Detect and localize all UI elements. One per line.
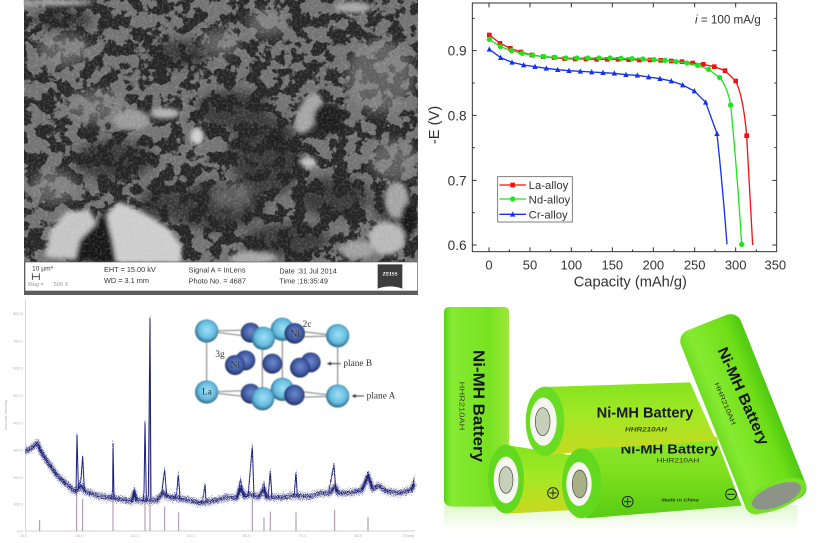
SEM info bar: Date :31 Jul 2014 <box>279 266 337 275</box>
y axis labels: 0.7 <box>448 173 467 188</box>
series: Cr-alloy <box>489 49 727 244</box>
series: La-alloy <box>489 35 753 245</box>
XRD axes: 100.0 <box>13 503 23 507</box>
battery: front lying <box>562 437 742 518</box>
XRD axes: 600.0 <box>13 367 23 371</box>
battery: standing left: Ni-MH Battery <box>469 350 486 462</box>
current annotation: i = 100 mA/g <box>695 14 761 27</box>
XRD axes: 700.0 <box>13 339 23 343</box>
battery: standing left <box>444 307 509 507</box>
XRD axes: 2Theta <box>402 534 415 538</box>
y axis title: -E (V) <box>427 106 443 144</box>
panel: Ni-MH batteries photo <box>444 307 811 532</box>
SEM info bar: Time :16:35:49 <box>279 276 328 285</box>
plot frame and ticks <box>472 3 777 252</box>
ZEISS logo <box>378 264 402 289</box>
x axis labels <box>485 257 786 272</box>
SEM info bar <box>24 262 418 295</box>
crystal labels: 3g <box>215 350 225 360</box>
crystal labels <box>202 320 396 402</box>
reference sticks <box>40 328 368 531</box>
legend: Nd-alloy <box>529 194 571 206</box>
x axis labels: 350 <box>764 257 786 272</box>
battery: front lying: Made in China <box>661 497 699 503</box>
x axis labels: 0 <box>485 257 493 272</box>
series: Nd-alloy <box>489 39 744 247</box>
plus symbol <box>622 496 633 507</box>
SEM info bar: Signal A = InLens <box>189 266 246 275</box>
XRD axes: 0.0 <box>17 529 23 533</box>
ZEISS logo: ZEISS <box>382 272 398 278</box>
XRD axes: 500.0 <box>13 394 23 398</box>
XRD axes: 70.0 <box>299 534 306 538</box>
x axis title: Capacity (mAh/g) <box>574 275 687 291</box>
XRD axes: 50.0 <box>187 534 195 538</box>
minus symbol <box>726 489 736 500</box>
XRD axes: 400.0 <box>13 421 23 425</box>
XRD axes <box>4 299 415 538</box>
XRD axes: 300.0 <box>13 449 23 453</box>
crystal labels: plane B <box>343 359 372 369</box>
floor reflection <box>444 505 797 532</box>
crystal labels: plane A <box>367 392 396 402</box>
plus symbol <box>548 488 558 498</box>
x axis labels: 250 <box>684 257 705 272</box>
battery: middle lying: HHR210AH <box>625 427 667 434</box>
battery: standing left: HHR210AH <box>458 382 467 430</box>
crystal labels: Ni <box>291 329 300 339</box>
SEM info bar: 500 X <box>54 282 69 288</box>
XRD axes: 800.0 <box>13 312 23 316</box>
SEM info bar: WD = 3.1 mm <box>104 276 149 285</box>
x axis labels: 100 <box>560 257 582 272</box>
y axis labels <box>448 44 467 253</box>
SEM info bar: Photo No. = 4687 <box>189 276 246 285</box>
crystal labels: La <box>202 388 213 398</box>
scale bar <box>32 273 39 280</box>
XRD axes: 40.0 <box>131 534 139 538</box>
panel: XRD pattern <box>4 299 415 538</box>
XRD axes: 20.0 <box>20 534 27 538</box>
SEM info bar: EHT = 15.00 kV <box>104 265 156 274</box>
x axis labels: 300 <box>725 257 746 272</box>
legend: Cr-alloy <box>529 209 568 221</box>
x axis labels: 150 <box>601 257 623 272</box>
panel: discharge curves chart <box>427 3 786 291</box>
XRD axes: 30.0 <box>76 534 83 538</box>
XRD axes: 60.0 <box>243 534 250 538</box>
crystal structure diagram <box>195 318 364 410</box>
battery: front lying: Ni-MH Battery <box>621 443 718 457</box>
y axis labels: 0.6 <box>448 238 467 253</box>
battery: middle lying: Ni-MH Battery <box>597 406 694 422</box>
y axis labels: 0.8 <box>448 108 467 123</box>
SEM info bar: Mag = <box>28 282 45 288</box>
XRD axes: 80.0 <box>355 534 362 538</box>
battery: middle lying <box>526 382 717 456</box>
crystal labels: Ni <box>231 361 240 371</box>
panel: SEM micrograph <box>13 0 418 295</box>
battery: leaning right: Ni-MH Battery <box>714 345 772 448</box>
XRD axes: Absolute Intensity <box>4 400 8 430</box>
x axis labels: 50 <box>523 257 537 272</box>
x axis labels: 200 <box>642 257 664 272</box>
legend <box>498 177 572 222</box>
crystal labels: 2c <box>303 320 311 330</box>
SEM info bar: 10 µm* <box>32 265 54 272</box>
battery: leaning right: HHR210AH <box>712 382 737 426</box>
legend: La-alloy <box>529 180 569 192</box>
diffraction trace <box>26 318 414 503</box>
battery: leaning right <box>677 311 811 520</box>
battery: front lying: HHR210AH <box>657 457 700 464</box>
battery: lower left lying <box>488 445 573 514</box>
y axis labels: 0.9 <box>448 44 467 59</box>
XRD axes: 200.0 <box>13 476 23 480</box>
